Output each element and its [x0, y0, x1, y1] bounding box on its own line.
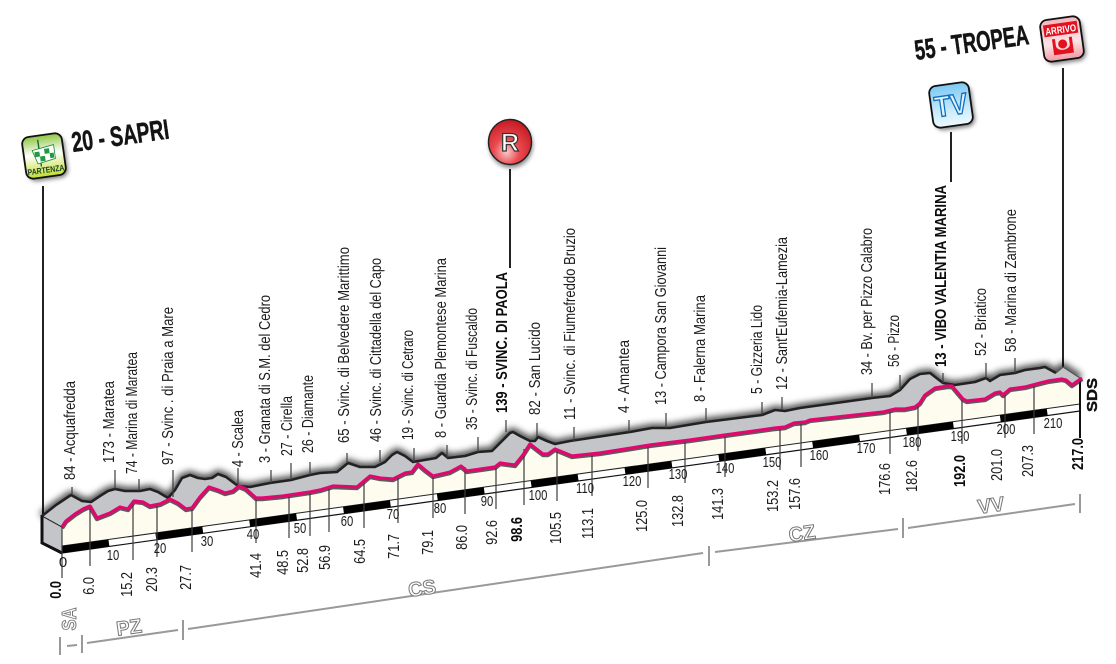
icon: intermediate sprint R [488, 120, 533, 168]
place labels: 46 - Svinc. di Cittadella del Capo [368, 258, 385, 442]
left side face [42, 516, 62, 552]
km scale numbers: 70 [387, 505, 399, 522]
place labels: 12 - Sant'Eufemia-Lamezia [774, 237, 791, 390]
place labels: 4 - Amantea [616, 340, 633, 413]
distance labels: 0.0 [48, 581, 65, 599]
km scale numbers: 200 [997, 420, 1015, 437]
title: start town: 20 - SAPRI [70, 114, 171, 158]
left edge [42, 515, 62, 553]
intermediate sprint pole [509, 169, 511, 268]
place labels: 13 - Campora San Giovanni [653, 247, 670, 405]
place labels: 74 - Marina di Maratea [124, 352, 141, 474]
terrain outline end [1056, 367, 1080, 378]
place labels: 34 - Bv. per Pizzo Calabro [859, 228, 876, 375]
icon: partenza [21, 132, 69, 183]
icon: arrivo: ARRIVO [1045, 23, 1077, 38]
km scale numbers [59, 414, 1062, 571]
distance labels: 141.3 [710, 488, 727, 520]
distance labels: 207.3 [1020, 445, 1037, 477]
place labels: 35 - Svinc. di Fuscaldo [464, 308, 481, 430]
place labels: 27 - Cirella [279, 396, 296, 456]
km scale numbers: 40 [247, 525, 259, 542]
distance labels: 48.5 [275, 550, 292, 575]
distance labels: 64.5 [352, 539, 369, 564]
distance labels: 86.0 [454, 525, 471, 550]
SDS label: SDS [1084, 378, 1101, 412]
km scale numbers: 110 [576, 479, 594, 496]
km scale numbers: 90 [481, 492, 493, 509]
km scale numbers: 80 [434, 499, 446, 516]
km scale band [62, 404, 1080, 553]
TV pole [950, 132, 952, 182]
terrain outline [42, 367, 1056, 516]
km scale numbers: 0 [59, 554, 67, 571]
distance labels: 132.8 [670, 495, 687, 527]
place labels: 11 - Svinc. di Fiumefreddo Bruzio [562, 228, 579, 420]
km scale numbers: 140 [716, 459, 734, 476]
km scale numbers: 190 [951, 427, 969, 444]
distance labels: 217.0 [1070, 438, 1087, 470]
province labels: SA [59, 608, 81, 630]
road surface fill [62, 378, 1081, 547]
distance labels: 105.5 [548, 512, 565, 544]
km scale numbers: 100 [529, 486, 547, 503]
place labels: 56 - Pizzo [886, 315, 903, 367]
elevation profile [42, 367, 1081, 553]
distance labels: 56.9 [317, 545, 334, 570]
distance labels: 79.1 [420, 530, 437, 555]
place labels: 8 - Falerna Marina [692, 295, 709, 402]
finish pole [1062, 68, 1064, 368]
km scale numbers: 120 [623, 472, 641, 489]
km scale numbers: 60 [341, 512, 353, 529]
distance labels: 157.6 [787, 478, 804, 510]
place labels: 52 - Briatico [973, 288, 990, 356]
distance labels: 176.6 [877, 463, 894, 495]
km scale numbers: 50 [294, 519, 306, 536]
province labels: CZ [787, 521, 817, 547]
km scale numbers: 130 [669, 465, 687, 482]
distance labels: 6.0 [81, 577, 98, 595]
km scale numbers: 20 [154, 539, 166, 556]
km scale numbers: 30 [201, 532, 213, 549]
km scale numbers: 150 [763, 453, 781, 470]
distance labels: 41.4 [248, 553, 265, 578]
place labels: 8 - Guardia Plemontese Marina [433, 258, 450, 438]
start pole [42, 186, 44, 517]
province labels: CS [407, 576, 437, 602]
place labels: 97 - Svinc . di Praia a Mare [160, 307, 177, 465]
place labels [62, 185, 1020, 480]
distance labels: 98.6 [509, 517, 526, 542]
distance labels: 153.2 [765, 480, 782, 512]
distance labels: 113.1 [580, 508, 597, 539]
distance labels: 92.6 [484, 520, 501, 545]
place labels: 4 - Scalea [230, 410, 247, 467]
province brackets [60, 494, 1080, 655]
place labels: 19 - Svinc. di Cetraro [400, 330, 417, 440]
distance labels: 125.0 [634, 500, 651, 532]
province labels: VV [976, 493, 1007, 519]
icon: TV: TV [933, 88, 970, 124]
distance labels: 20.3 [144, 567, 161, 592]
distance labels: 52.8 [295, 548, 312, 573]
place labels: 3 - Granata di S.M. del Cedro [257, 295, 274, 463]
km scale numbers: 10 [107, 546, 119, 563]
altitude profile line [62, 378, 1082, 528]
grey terrain fill [42, 367, 1080, 527]
distance labels: 182.6 [904, 460, 921, 492]
icon: arrivo [1039, 15, 1087, 66]
icon: TV [928, 81, 976, 132]
km scale numbers: 180 [903, 433, 921, 450]
place labels: 5 - Gizzeria Lido [749, 305, 766, 394]
province labels [59, 493, 1007, 641]
place labels: 84 - Acquafredda [62, 381, 79, 480]
place labels: 58 - Marina di Zambrone [1003, 209, 1020, 352]
place labels: 139 - SVINC. DI PAOLA [494, 272, 511, 413]
icon: intermediate sprint R: R [501, 129, 519, 157]
place labels: 173 - Maratea [101, 381, 118, 463]
title: finish town: 55 - TROPEA [913, 19, 1031, 66]
distance labels: 15.2 [119, 572, 136, 597]
distance labels: 201.0 [989, 449, 1006, 481]
km scale numbers: 160 [810, 446, 828, 463]
km scale numbers: 210 [1044, 414, 1062, 431]
distance labels: 71.7 [386, 534, 403, 559]
km ticks [62, 358, 1080, 578]
distance labels: 192.0 [952, 455, 969, 487]
province labels: PZ [115, 615, 143, 641]
place labels: 26 - Diamante [300, 375, 317, 453]
place labels: 13 - VIBO VALENTIA MARINA [933, 185, 950, 367]
icon: partenza: PARTENZA [27, 162, 65, 177]
place labels: 82 - San Lucido [527, 322, 544, 415]
km scale numbers: 170 [857, 439, 875, 456]
place labels: 65 - Svinc. di Belvedere Marittimo [336, 247, 353, 443]
distance labels: 27.7 [178, 565, 195, 590]
distance labels [48, 438, 1087, 599]
